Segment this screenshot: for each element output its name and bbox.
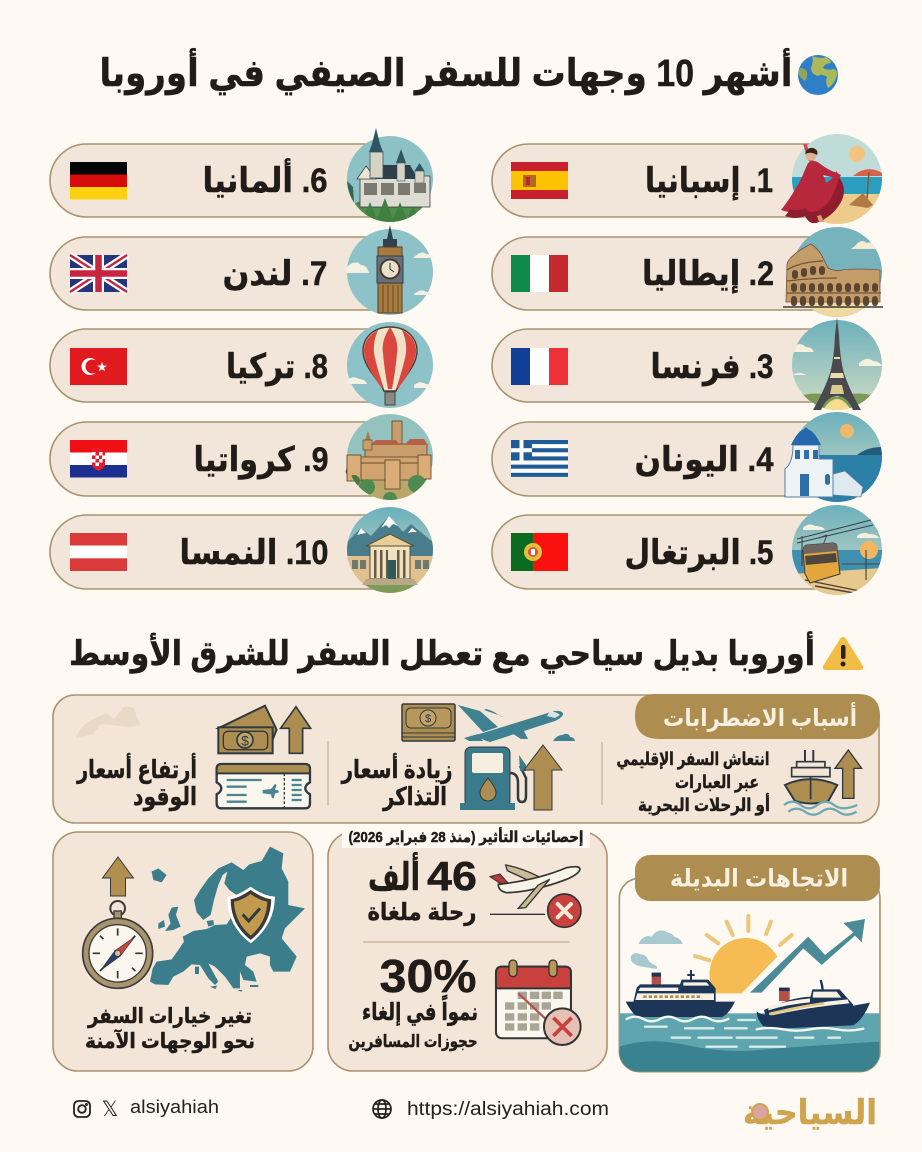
flag: Spain xyxy=(511,162,568,199)
icon: calendar with cancel mark xyxy=(496,960,581,1045)
panel: destination 8 Turkey xyxy=(50,322,433,408)
stat: 30% growth xyxy=(348,950,478,1052)
illustration: smoke xyxy=(631,953,657,969)
text: regional travel revival: أو الرحلات البحرية xyxy=(638,793,770,816)
text: fuel prices xyxy=(75,753,197,812)
icon: money stack xyxy=(402,704,455,741)
label: 8. تركيا xyxy=(226,348,328,387)
stat: 30% growth: 30% xyxy=(380,950,476,1002)
flag: Austria xyxy=(70,533,127,571)
stat: cancelled flights: 46 xyxy=(427,853,477,899)
panel: alternative trends xyxy=(619,855,880,1072)
label: 4. اليونان xyxy=(634,441,774,480)
map: Europe xyxy=(150,847,305,992)
text: regional travel revival xyxy=(616,749,770,816)
panel: destination 9 Croatia xyxy=(50,414,433,506)
handle: alsiyahiah xyxy=(130,1097,219,1117)
icon: Eiffel Tower xyxy=(792,317,882,410)
text: regional travel revival: عبر العبارات xyxy=(675,772,759,793)
panel: destination 7 London xyxy=(50,225,433,315)
label: 5. البرتغال xyxy=(624,534,774,573)
icon: faded map shape xyxy=(76,707,141,738)
footer: social xyxy=(74,1097,219,1121)
label: 3. فرنسا xyxy=(650,348,774,387)
illustration: rising arrow xyxy=(750,919,865,993)
icon: Santorini church xyxy=(785,412,882,502)
panel: destination 4 Greece xyxy=(492,412,882,502)
flag: UK xyxy=(70,255,127,292)
icon: up arrow xyxy=(102,857,134,896)
icon: hot air balloon xyxy=(347,322,433,408)
divider xyxy=(363,941,570,943)
icon: money stack: $ xyxy=(425,713,431,725)
text: ticket prices xyxy=(340,753,452,812)
icon: Big Ben xyxy=(347,225,433,315)
icon: plane ticket xyxy=(217,764,310,808)
illustration: white wave crests xyxy=(627,1017,863,1031)
text: safe destinations xyxy=(85,1005,255,1053)
illustration: left cruise ship xyxy=(626,970,735,1017)
header tab xyxy=(635,694,880,739)
label: 2. إيطاليا xyxy=(642,255,774,294)
flag: Croatia xyxy=(70,440,127,478)
illustration: sun xyxy=(695,916,792,993)
stat: 30% growth: نمواً في إلغاء xyxy=(362,995,478,1026)
label: 9. كرواتيا xyxy=(194,441,328,480)
icon: shield with check xyxy=(227,887,275,943)
icon: Vienna palace and mountains xyxy=(347,507,433,595)
title: أشهر 10 وجهات للسفر الصيفي في أوروبا xyxy=(100,48,792,96)
text: regional travel revival: انتعاش السفر الإقليمي xyxy=(616,749,770,770)
panel: destination 1 Spain xyxy=(492,134,882,226)
text: fuel prices: الوقود xyxy=(133,783,197,812)
panel: causes of disruption xyxy=(53,694,880,823)
icon: flamenco dancer on a beach xyxy=(781,134,882,226)
panel: destination 5 Portugal xyxy=(492,505,882,595)
stat: cancelled flights: رحلة ملغاة xyxy=(368,899,476,926)
icon: Neuschwanstein castle xyxy=(347,128,433,223)
flag: France xyxy=(511,348,568,385)
panel: destination 3 France xyxy=(492,317,882,410)
text: ticket prices: التذاكر xyxy=(381,783,447,812)
stat: 30% growth: حجوزات المسافرين xyxy=(348,1032,478,1052)
icon: airplane with cancel mark xyxy=(490,865,581,927)
divider xyxy=(328,741,602,805)
text: safe destinations: تغير خيارات السفر xyxy=(87,1005,252,1028)
label: 10. النمسا xyxy=(180,534,328,572)
icon: X: 𝕏 xyxy=(102,1097,118,1121)
header tab: الاتجاهات البديلة xyxy=(670,865,848,892)
icon: globe xyxy=(798,55,838,95)
flag: Portugal xyxy=(511,533,568,571)
icon: instagram xyxy=(74,1101,90,1117)
panel: impact statistics xyxy=(328,826,607,1071)
icon: web globe xyxy=(373,1100,391,1118)
icon: fuel pump with arrow xyxy=(460,745,562,810)
section heading: أوروبا بديل سياحي مع تعطل السفر للشرق الأوسط xyxy=(69,631,815,674)
flag: Italy xyxy=(511,255,568,292)
stat: cancelled flights xyxy=(368,852,477,926)
panel: safer destinations xyxy=(53,832,313,1071)
label: 1. إسبانيا xyxy=(645,162,773,201)
stat: cancelled flights: ألف xyxy=(368,852,420,899)
footer: logo: السياحية xyxy=(743,1094,877,1132)
footer: website xyxy=(373,1099,609,1120)
panel: destination 6 Germany xyxy=(50,128,433,223)
text: safe destinations: نحو الوجهات الآمنة xyxy=(85,1029,255,1053)
label: 7. لندن xyxy=(222,255,328,293)
icon: banknotes with up arrow xyxy=(218,706,311,753)
flag: Germany xyxy=(70,162,127,200)
icon: compass xyxy=(83,901,153,988)
header tab xyxy=(635,855,880,901)
label: 6. ألمانيا xyxy=(202,158,328,200)
text: fuel prices: أرتفاع أسعار xyxy=(75,753,197,784)
icon: warning triangle xyxy=(823,637,863,670)
icon: banknotes with up arrow: $ xyxy=(241,732,249,748)
url: https://alsiyahiah.com xyxy=(407,1099,609,1120)
illustration: cloud xyxy=(638,930,683,944)
icon: Lisbon tram xyxy=(792,505,882,595)
icon: Colosseum xyxy=(783,227,883,317)
text: ticket prices: زيادة أسعار xyxy=(340,753,452,784)
illustration: sea xyxy=(619,1013,880,1072)
illustration: right cruise ship xyxy=(757,980,870,1029)
statistics subtitle: إحصائيات التأثير (منذ 28 فبراير 2026) xyxy=(348,827,584,846)
panel: destination 10 Austria xyxy=(50,507,433,595)
flag: Greece xyxy=(511,440,568,477)
panel: destination 2 Italy xyxy=(492,227,883,317)
icon: ferry with arrow xyxy=(784,750,862,815)
header tab: أسباب الاضطرابات xyxy=(663,702,857,732)
flag: Turkey xyxy=(70,348,127,385)
icon: teal airplane xyxy=(458,705,575,742)
icon: fortress xyxy=(346,414,433,506)
